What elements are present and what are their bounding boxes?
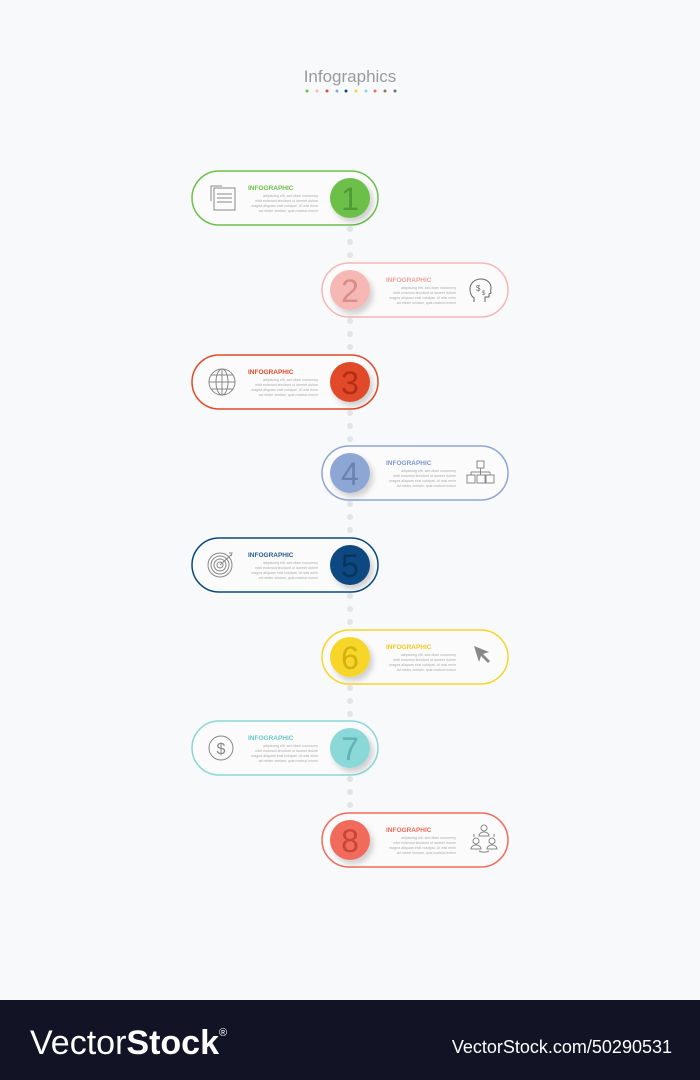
- icon: head with money: [470, 279, 491, 302]
- step 3: INFOGRAPHIC: [248, 369, 294, 376]
- step 5: INFOGRAPHIC: [248, 552, 294, 559]
- step 6: INFOGRAPHIC: [386, 644, 432, 651]
- icon: head with money: $: [482, 291, 486, 297]
- step 5: magna aliquam erat volutpat. Ut wisi enim: [251, 571, 318, 575]
- step 8: 8: [341, 823, 359, 859]
- icon: document: [211, 186, 235, 210]
- step 6: ad minim veniam, quis nostrud exerci: [397, 668, 456, 672]
- step 3: [192, 355, 378, 409]
- step 7: magna aliquam erat volutpat. Ut wisi enim: [251, 754, 318, 758]
- step 8: INFOGRAPHIC: [386, 827, 432, 834]
- step 4: nibh euismod tincidunt ut laoreet dolore: [393, 474, 456, 478]
- icon: hierarchy: [467, 461, 494, 483]
- step 7: nibh euismod tincidunt ut laoreet dolore: [255, 749, 318, 753]
- step 1: INFOGRAPHIC: [248, 185, 294, 192]
- step 8: magna aliquam erat volutpat. Ut wisi enim: [389, 846, 456, 850]
- icon: dollar: $: [217, 741, 226, 758]
- step 5: adipiscing elit, sed diam nonummy: [263, 561, 318, 565]
- title: Infographics: [304, 67, 396, 86]
- step 8: nibh euismod tincidunt ut laoreet dolore: [393, 841, 456, 845]
- step 3: adipiscing elit, sed diam nonummy: [263, 378, 318, 382]
- icon: target: [208, 553, 232, 577]
- footer: VectorStock: [30, 1024, 219, 1062]
- step 5: ad minim veniam, quis nostrud exerci: [259, 576, 318, 580]
- icon: globe: [209, 369, 235, 395]
- icon: head with money: $: [476, 284, 481, 293]
- step 4: magna aliquam erat volutpat. Ut wisi enim: [389, 479, 456, 483]
- step 2: 2: [341, 273, 359, 309]
- step 4: adipiscing elit, sed diam nonummy: [401, 469, 456, 473]
- step 2: adipiscing elit, sed diam nonummy: [401, 286, 456, 290]
- step 5: [192, 538, 378, 592]
- step 7: 7: [341, 731, 359, 767]
- step 1: nibh euismod tincidunt ut laoreet dolore: [255, 199, 318, 203]
- step 1: [192, 171, 378, 225]
- step 4: [322, 446, 508, 500]
- step 7: [192, 721, 378, 775]
- step 6: [322, 630, 508, 684]
- footer: ®: [219, 1027, 227, 1039]
- step 1: ad minim veniam, quis nostrud exerci: [259, 209, 318, 213]
- step 6: magna aliquam erat volutpat. Ut wisi enim: [389, 663, 456, 667]
- step 2: nibh euismod tincidunt ut laoreet dolore: [393, 291, 456, 295]
- step 3: ad minim veniam, quis nostrud exerci: [259, 393, 318, 397]
- step 3: nibh euismod tincidunt ut laoreet dolore: [255, 383, 318, 387]
- step 1: 1: [341, 181, 359, 217]
- step 4: INFOGRAPHIC: [386, 460, 432, 467]
- step 5: nibh euismod tincidunt ut laoreet dolore: [255, 566, 318, 570]
- footer: [0, 1000, 700, 1080]
- step 7: adipiscing elit, sed diam nonummy: [263, 744, 318, 748]
- step 6: nibh euismod tincidunt ut laoreet dolore: [393, 658, 456, 662]
- step 4: ad minim veniam, quis nostrud exerci: [397, 484, 456, 488]
- icon: cursor: [474, 646, 490, 663]
- step 5: 5: [341, 548, 359, 584]
- step 1: adipiscing elit, sed diam nonummy: [263, 194, 318, 198]
- step 2: [322, 263, 508, 317]
- step 2: magna aliquam erat volutpat. Ut wisi enim: [389, 296, 456, 300]
- step 4: 4: [341, 456, 359, 492]
- dotted connector: [347, 226, 353, 808]
- step 3: 3: [341, 365, 359, 401]
- step 1: magna aliquam erat volutpat. Ut wisi enim: [251, 204, 318, 208]
- icon: team: [471, 825, 497, 852]
- footer: VectorStock.com/50290531: [452, 1037, 672, 1057]
- step 2: ad minim veniam, quis nostrud exerci: [397, 301, 456, 305]
- step 6: 6: [341, 640, 359, 676]
- step 2: INFOGRAPHIC: [386, 277, 432, 284]
- step 8: [322, 813, 508, 867]
- step 3: magna aliquam erat volutpat. Ut wisi enim: [251, 388, 318, 392]
- step 8: adipiscing elit, sed diam nonummy: [401, 836, 456, 840]
- step 7: ad minim veniam, quis nostrud exerci: [259, 759, 318, 763]
- step 6: adipiscing elit, sed diam nonummy: [401, 653, 456, 657]
- step 8: ad minim veniam, quis nostrud exerci: [397, 851, 456, 855]
- step 7: INFOGRAPHIC: [248, 735, 294, 742]
- icon: dollar: [209, 736, 233, 760]
